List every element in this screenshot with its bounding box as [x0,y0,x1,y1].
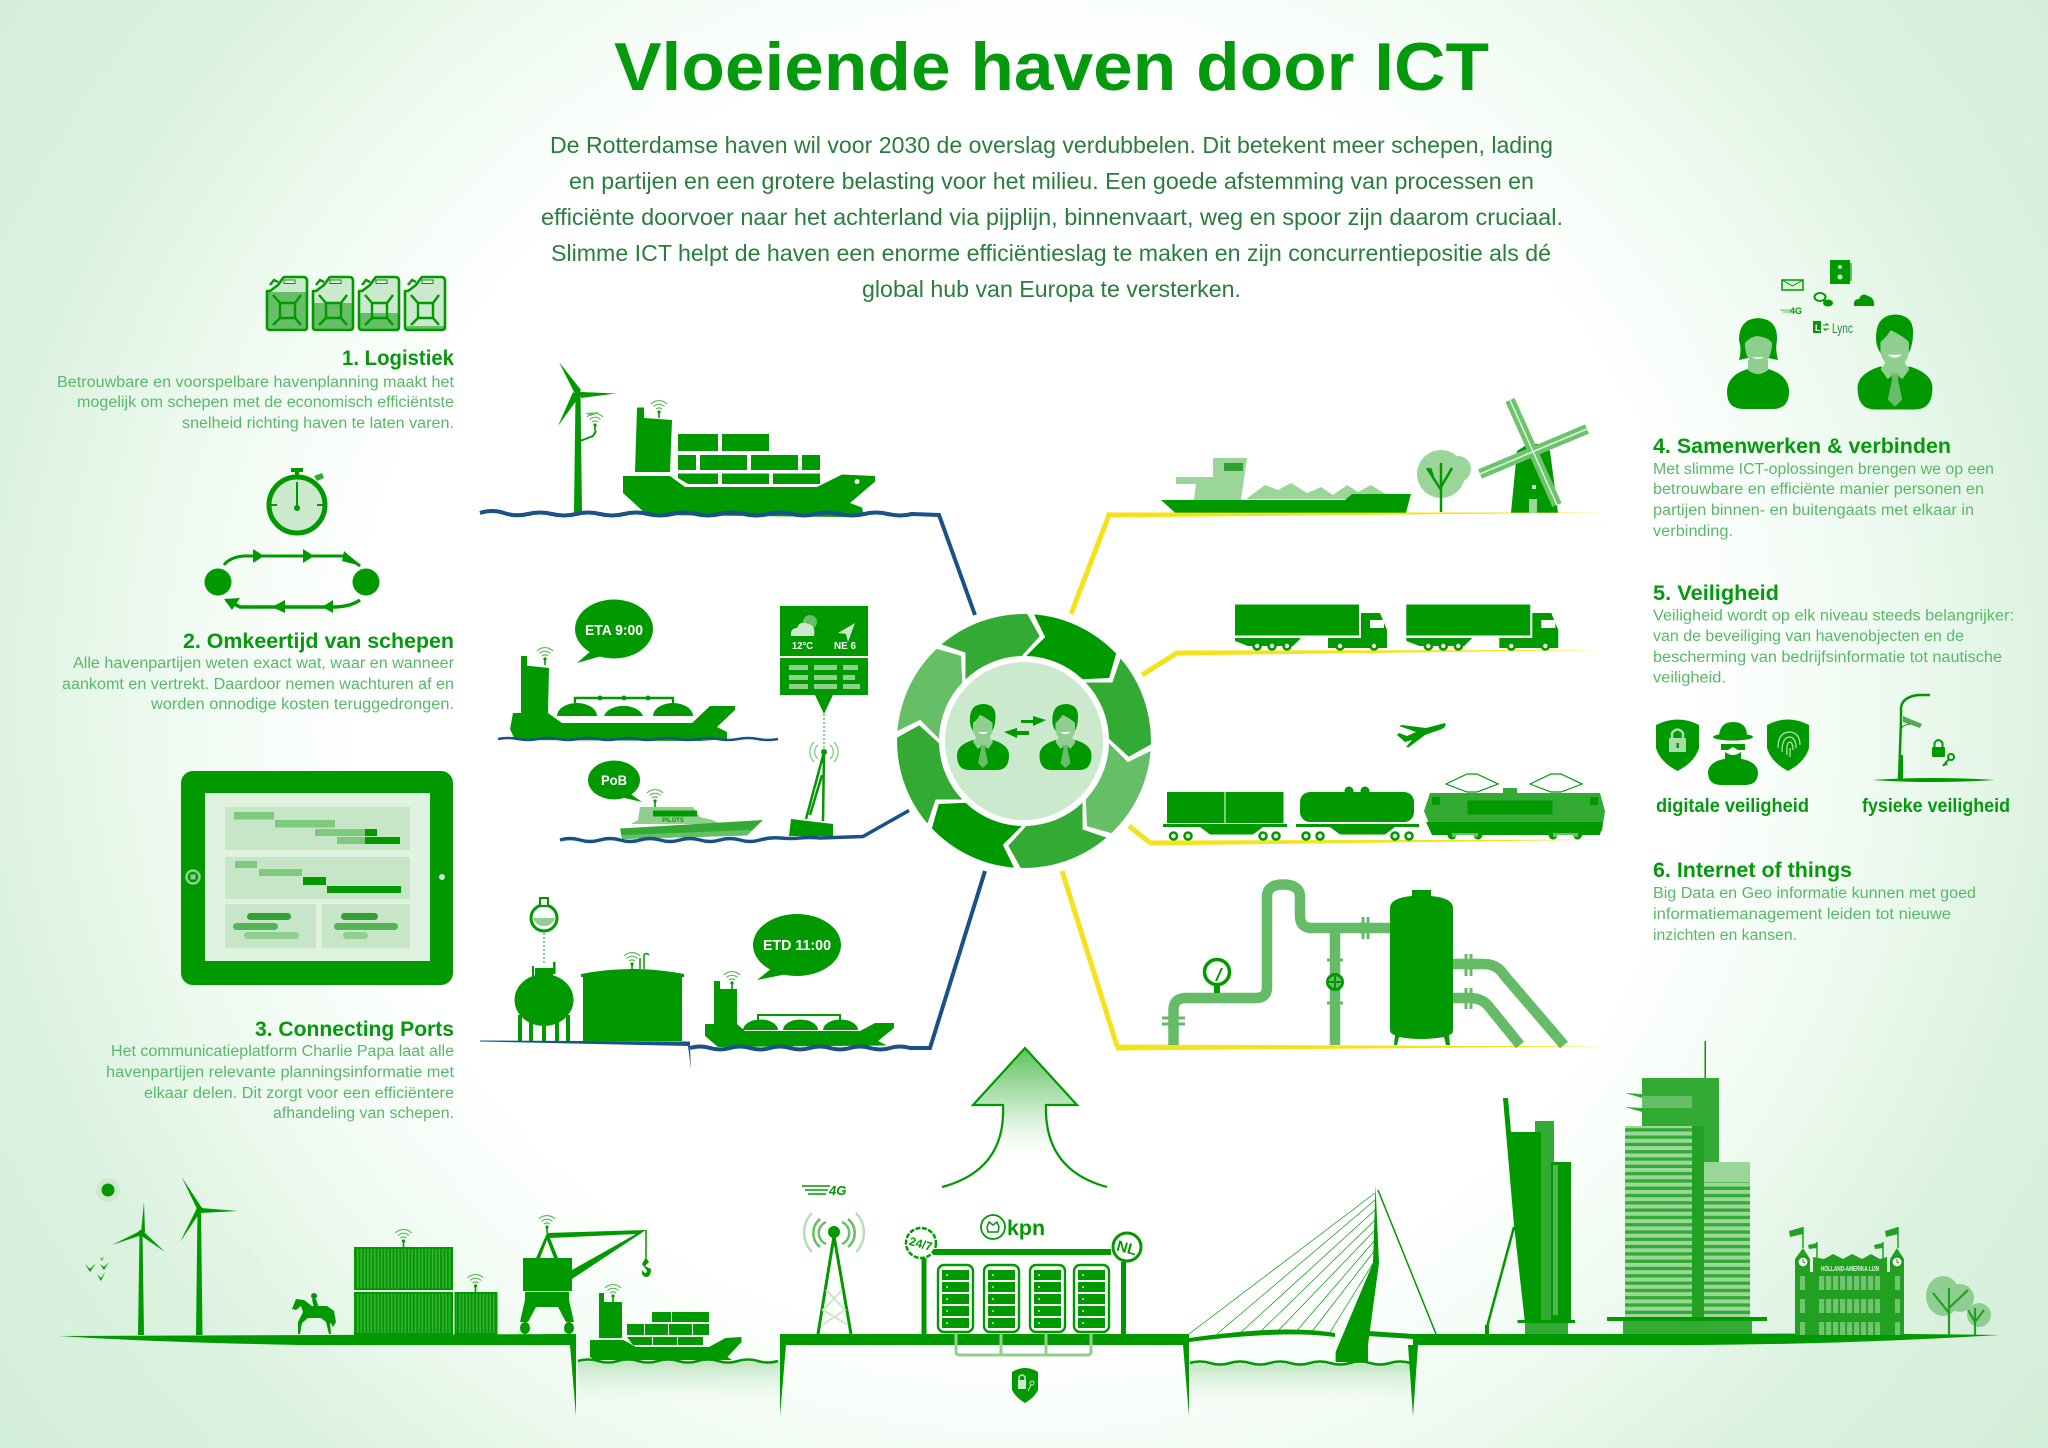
text block: 5. Veiligheid: Veiligheid wordt op elk niveau steeds belangrijker: [1653,608,2014,624]
text block: 4. Samenwerken & verbinden: 4. Samenwerken & verbinden [1653,435,1951,458]
4G icon: 4G [1790,306,1802,316]
speech bubble: ETD [753,914,841,980]
tower group right [1607,1041,1767,1334]
address book icon [1830,260,1852,284]
server racks [938,1265,1109,1332]
blue route line 3 [560,810,909,842]
cylindrical tank [581,953,684,1041]
cell tower with 4G: 4G [828,1183,846,1198]
label: fysieke veiligheid: fysieke veiligheid [1862,796,2010,817]
offshore wind turbine [558,362,616,512]
yellow line 2 [1142,650,1607,675]
text block: 4. Samenwerken & verbinden: betrouwbare en efficiënte manier personen en [1653,481,1984,498]
gas tanker [510,648,735,741]
cloud icon [1854,295,1874,306]
text block: 2. Omkeertijd van schepen: worden onnodige kosten teruggedrongen. [150,696,454,713]
sign [780,606,868,714]
tower group left [1485,1098,1575,1334]
containers [355,1230,496,1334]
cloud [226,1247,262,1270]
pipes [1174,884,1564,1045]
intro text: en partijen en een grotere belasting voor het milieu. Een goede afstemming van processen en [569,168,1534,194]
intro text: efficiënte doorvoer naar het achterland via pijplijn, binnenvaart, weg en spoor zijn daarom cruciaal. [541,204,1563,230]
pilot boat [620,790,763,839]
text block: 1. Logistiek: 1. Logistiek [342,347,454,370]
windmill [1480,400,1587,513]
Erasmus bridge [1189,1185,1436,1362]
NL badge [1113,1233,1141,1261]
text block: 6. Internet of things: informatiemanagement leiden tot nieuwe [1653,906,1951,923]
text block: 2. Omkeertijd van schepen [62,630,454,713]
collaboration icons [1727,260,1932,410]
two people exchanging [957,704,1092,770]
flask [531,898,557,963]
text block: 3. Connecting Ports: 3. Connecting Ports [255,1018,454,1041]
speech bubble: ETD: ETD 11:00 [763,937,831,954]
text block: 6. Internet of things [1653,859,1976,944]
text block: 2. Omkeertijd van schepen: aankomt en vertrekt. Daardoor nemen wachturen af en [62,676,454,693]
tank wagon [1296,786,1419,841]
pressure gauge [1204,960,1230,993]
yellow line 4 [1062,871,1609,1050]
speech bubble: ETA [575,600,653,663]
chat icon [1814,293,1833,306]
big up arrow [942,1048,1107,1187]
text block: 3. Connecting Ports [106,1018,455,1122]
24/7 badge: 24/7 [908,1234,934,1254]
speech bubble: PoB [588,760,642,802]
speech bubble: PoB: PoB [601,772,627,788]
sun and birds [85,1178,120,1281]
text block: 5. Veiligheid: bescherming van bedrijfsinformatie tot nautische [1653,649,2002,666]
text block: 4. Samenwerken & verbinden: partijen binnen- en buitengaats met elkaar in [1653,502,1974,519]
kpn logo [981,1215,1045,1240]
valve [1328,974,1342,990]
arrow ring [869,586,1179,896]
gas tanker departing [705,972,894,1047]
flanges [1162,917,1471,1024]
blue route line 1 [480,511,975,615]
Lync logo: Lync [1832,320,1853,336]
kpn logo: kpn [1007,1217,1045,1240]
speech bubble: ETA: ETA 9:00 [585,622,643,639]
text block: 3. Connecting Ports: afhandeling van schepen. [273,1105,454,1122]
ground and water basins [59,1334,2000,1416]
NL badge: NL [1115,1238,1138,1259]
Holland-Amerika building [1789,1227,1904,1335]
mail icon [1782,280,1803,290]
text block: 2. Omkeertijd van schepen: 2. Omkeertijd van schepen [183,630,454,653]
sea route 1: wind turbine and container ship [480,362,975,615]
blue route line 4 [690,871,985,1050]
airplane [1397,723,1446,747]
yellow line 3 [1129,826,1620,846]
text block: 4. Samenwerken & verbinden [1653,435,1994,540]
title: Vloeiende haven door ICT [614,29,1489,105]
text block: 5. Veiligheid: veiligheid. [1653,670,1726,686]
text block: 4. Samenwerken & verbinden: verbinding. [1653,523,1733,540]
person: man [1858,314,1932,410]
text block: 3. Connecting Ports: elkaar delen. Dit zorgt voor een efficiëntere [144,1085,454,1102]
security shield [1012,1368,1038,1403]
intro text: Slimme ICT helpt de haven een enorme efficiëntieslag te maken en zijn concurrentiepositie als dé [551,240,1551,266]
icon: spy [1708,722,1758,785]
icon: lock shield [1656,720,1699,771]
pilot boat: PILOTS [662,818,684,824]
sign: 12°C [792,640,813,652]
icon: fingerprint shield [1767,720,1809,771]
container ship [623,401,875,517]
crane [520,1216,651,1334]
quay [480,1040,691,1069]
vessel [1390,890,1453,1045]
Lync logo [1813,320,1853,336]
Holland-Amerika building: HOLLAND-AMERIKA LIJN [1821,1264,1879,1273]
intro text: De Rotterdamse haven wil voor 2030 de overslag verdubbelen. Dit betekent meer schepen, lading [550,132,1553,158]
skyline [59,1041,2000,1416]
24/7 badge [906,1228,936,1258]
text block: 3. Connecting Ports: havenpartijen relevante planningsinformatie met [106,1064,455,1081]
tree [1417,450,1471,512]
small container ship [590,1285,742,1360]
Lync logo: L [1815,323,1821,333]
text block: 3. Connecting Ports: Het communicatieplatform Charlie Papa laat alle [111,1043,454,1060]
pipeline [1162,884,1564,1045]
wind turbines [112,1177,238,1335]
icon: street lamp with camera and lock [1872,695,1995,782]
buoy [789,742,838,836]
sea route 4: storage tanks and departing tanker [480,871,985,1069]
text block: 6. Internet of things: inzichten en kansen. [1653,927,1797,944]
icon: jerrycans [267,277,445,330]
text block: 1. Logistiek: Betrouwbare en voorspelbare havenplanning maakt het [57,374,455,391]
cell tower with 4G [802,1183,864,1334]
trees [1926,1276,1991,1335]
sea route 3: pilot boat [560,760,909,842]
sea route 2: gas tanker with ETA [498,600,778,741]
intro text: global hub van Europa te versterken. [862,276,1241,302]
icon: stopwatch [269,468,325,533]
weather sign on buoy [780,606,868,836]
sign: NE 6 [834,640,856,652]
text block: 5. Veiligheid: van de beveiliging van havenobjecten en de [1653,628,1964,645]
flat wagon [1163,792,1287,841]
icon: tablet with planning [181,771,453,985]
central wheel [869,586,1179,896]
label: digitale veiligheid: digitale veiligheid [1656,796,1809,817]
text block: 1. Logistiek: mogelijk om schepen met de economisch efficiëntste [77,394,454,411]
trucks [1235,604,1558,651]
text block: 6. Internet of things: Big Data en Geo informatie kunnen met goed [1653,885,1976,902]
sphere tank [514,962,574,1041]
locomotive [1424,774,1605,840]
person: woman [1727,318,1789,409]
blue water line 2 [498,738,778,740]
horse and rider [292,1293,336,1334]
text block: 5. Veiligheid: 5. Veiligheid [1653,582,1779,605]
train [1163,774,1605,841]
intro text [541,132,1563,302]
yellow line 1 [1071,512,1607,614]
text block: 6. Internet of things: 6. Internet of things [1653,859,1852,882]
icon: turnaround loop [204,549,380,613]
KPN datacenter [906,1215,1141,1403]
text block: 5. Veiligheid [1653,582,2014,686]
text block: 1. Logistiek: snelheid richting haven te laten varen. [182,415,454,432]
text block: 2. Omkeertijd van schepen: Alle havenpartijen weten exact wat, waar en wanneer [73,655,454,672]
text block: 4. Samenwerken & verbinden: Met slimme ICT-oplossingen brengen we op een [1653,461,1994,478]
4G icon [1780,306,1802,316]
text block: 1. Logistiek [57,347,455,432]
barge with dredge [1161,458,1411,513]
